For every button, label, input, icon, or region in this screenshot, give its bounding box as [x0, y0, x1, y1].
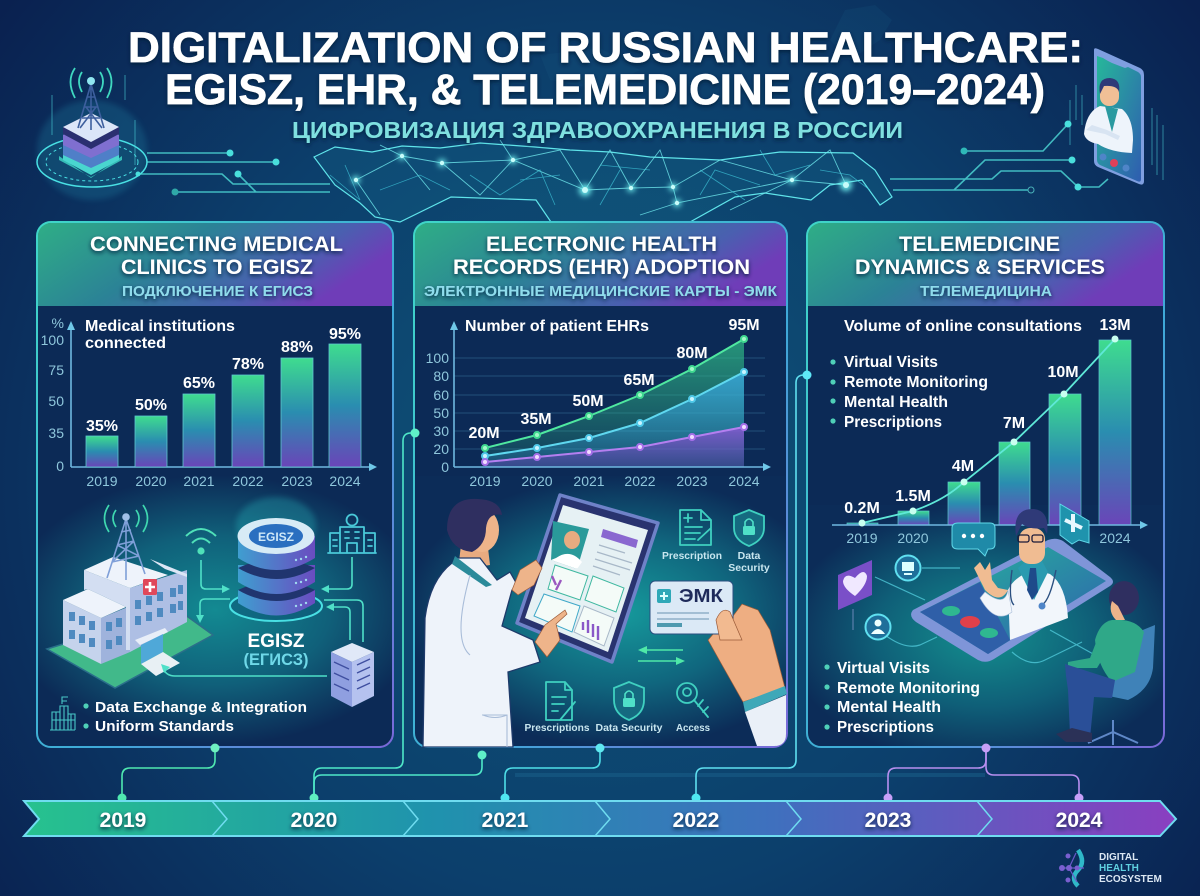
timeline connectors: [122, 375, 1079, 800]
bar chart: institutions connected: 88%: [281, 339, 313, 356]
panel heading: DYNAMICS & SERVICES: [855, 256, 1105, 279]
panel: EGISZ: [37, 222, 393, 747]
panel header: [415, 223, 786, 306]
bar chart: institutions connected: 50%: [135, 397, 167, 414]
EGISZ label: (ЕГИСЗ): [244, 650, 308, 669]
panel heading: ЭЛЕКТРОННЫЕ МЕДИЦИНСКИЕ КАРТЫ - ЭМК: [424, 283, 778, 300]
panel heading: ТЕЛЕМЕДИЦИНА: [920, 283, 1052, 300]
icon: data security: [614, 682, 644, 720]
area chart: patient EHRs: 60: [433, 387, 449, 403]
illustration: patient on chair: [1056, 581, 1155, 745]
bar chart: institutions connected: Medical institutions: [85, 318, 235, 335]
area chart: patient EHRs: 2020: [521, 473, 553, 489]
services list top: Mental Health: [844, 394, 948, 411]
icon: city grid: [50, 697, 75, 730]
area chart: patient EHRs: 50: [433, 405, 449, 421]
panel heading: ELECTRONIC HEALTH: [486, 233, 717, 256]
bar chart: institutions connected: 75: [48, 362, 64, 378]
bar chart: institutions connected: 2022: [232, 473, 264, 489]
area chart: patient EHRs: [426, 317, 771, 489]
area chart: patient EHRs: 2021: [573, 473, 605, 489]
EGISZ label: EGISZ: [248, 631, 305, 652]
area chart: patient EHRs: 20: [433, 441, 449, 457]
timeline arrow 2019–2024: 2020: [291, 809, 337, 832]
services list bottom: Mental Health: [837, 699, 941, 716]
area chart: patient EHRs: 2023: [676, 473, 708, 489]
area chart: patient EHRs: 0: [441, 459, 449, 475]
panel: EHR: [414, 222, 787, 747]
panel heading: ПОДКЛЮЧЕНИЕ К ЕГИСЗ: [122, 283, 313, 300]
EMK card in hand: ЭМК: [679, 586, 724, 606]
bar chart: institutions connected: 78%: [232, 356, 264, 373]
circuit lines left: [136, 150, 330, 196]
chart: online consultations: 7M: [1003, 415, 1025, 432]
logo: digital health ecosystem: HEALTH: [1099, 863, 1139, 874]
bar chart: institutions connected: 100: [41, 332, 64, 348]
icon: medical cross bubble: [1060, 504, 1089, 544]
bar chart: institutions connected: %: [52, 315, 64, 331]
area chart: patient EHRs: 95M: [728, 317, 760, 334]
icon: prescription: [680, 510, 711, 545]
map of Russia network: [314, 5, 892, 222]
icon labels: [662, 550, 770, 574]
services list top: Remote Monitoring: [844, 374, 988, 391]
bar chart: institutions connected: 95%: [329, 326, 361, 343]
icon labels: Data: [738, 550, 761, 562]
panel heading: CLINICS TO EGISZ: [121, 256, 313, 279]
icon: monitor: [896, 556, 920, 580]
icon: shield: [734, 510, 764, 546]
panel heading: [855, 233, 1105, 300]
services list top: Prescriptions: [844, 414, 942, 431]
bar chart: institutions connected: 2020: [135, 473, 167, 489]
area chart: patient EHRs: Number of patient EHRs: [465, 318, 649, 335]
bar chart: institutions connected: [41, 315, 377, 489]
bottom icon labels: [524, 722, 710, 734]
chart: online consultations: 13M: [1099, 317, 1131, 334]
icon labels: Security: [728, 562, 770, 574]
chart: online consultations: 2019: [846, 530, 878, 546]
timeline arrow 2019–2024: [24, 801, 1176, 836]
icon: access key: [677, 683, 708, 717]
icon: clinic: [328, 514, 376, 553]
area chart: patient EHRs: 2019: [469, 473, 501, 489]
bottom icon labels: Prescriptions: [524, 722, 590, 734]
panel heading: RECORDS (EHR) ADOPTION: [453, 256, 750, 279]
timeline arrow 2019–2024: 2023: [865, 809, 911, 832]
title: EGISZ, EHR, & TELEMEDICINE (2019–2024): [165, 66, 1045, 114]
services list top: Virtual Visits: [844, 354, 938, 371]
bar chart: institutions connected: connected: [85, 335, 166, 352]
area chart: patient EHRs: 80: [433, 368, 449, 384]
title: DIGITALIZATION OF RUSSIAN HEALTHCARE:: [128, 24, 1083, 72]
area chart: patient EHRs: 80M: [676, 345, 708, 362]
area chart: patient EHRs: 100: [426, 350, 449, 366]
services list bottom: Remote Monitoring: [837, 680, 980, 697]
timeline arrow 2019–2024: 2019: [100, 809, 146, 832]
data flow arrows: [161, 557, 363, 676]
bar chart: institutions connected: 35: [48, 425, 64, 441]
area chart: patient EHRs: 35M: [520, 411, 552, 428]
bar chart: institutions connected: 2021: [183, 473, 215, 489]
bottom icon labels: Access: [676, 722, 710, 734]
panel: telemedicine: [807, 222, 1164, 747]
illustration: hospital building: [47, 505, 213, 688]
panel heading: CONNECTING MEDICAL: [90, 233, 343, 256]
chart: online consultations: 10M: [1047, 364, 1079, 381]
bar chart: institutions connected: 50: [48, 393, 64, 409]
services list bottom: Virtual Visits: [837, 660, 930, 677]
area chart: patient EHRs: 30: [433, 423, 449, 439]
title: [128, 24, 1083, 143]
connector lines: [875, 568, 1095, 663]
panel heading: TELEMEDICINE: [899, 233, 1060, 256]
chart: online consultations: 4M: [952, 458, 974, 475]
bullet list: Uniform Standards: [95, 718, 234, 735]
chart: online consultations: 2020: [897, 530, 929, 546]
illustration: phone with doctor: [911, 509, 1113, 662]
icon labels: Prescription: [662, 550, 722, 562]
chart: online consultations: [832, 317, 1148, 546]
icon: heart tag: [838, 560, 872, 630]
EGISZ label: [244, 631, 308, 669]
area chart: patient EHRs: 20M: [468, 425, 500, 442]
panel heading: [90, 233, 343, 300]
bottom icon labels: Data Security: [596, 722, 663, 734]
logo: digital health ecosystem: DIGITAL: [1099, 852, 1138, 863]
bullet list: [83, 699, 307, 735]
timeline arrow 2019–2024: 2024: [1056, 809, 1103, 832]
icon: person: [866, 614, 890, 640]
area chart: patient EHRs: 2022: [624, 473, 656, 489]
panel header: [38, 223, 392, 306]
area chart: patient EHRs: 2024: [728, 473, 760, 489]
icon: tower on data stack: [37, 68, 147, 200]
panel header: [808, 223, 1163, 306]
timeline arrow 2019–2024: 2021: [482, 809, 529, 832]
bar chart: institutions connected: 35%: [86, 418, 118, 435]
icon: EGISZ database: [230, 497, 322, 621]
services list bottom: [824, 660, 980, 736]
timeline arrow 2019–2024: 2022: [673, 809, 719, 832]
logo: digital health ecosystem: ECOSYSTEM: [1099, 874, 1162, 885]
bar chart: institutions connected: 0: [56, 458, 64, 474]
chart: online consultations: Volume of online consultations: [844, 318, 1082, 335]
bar chart: institutions connected: 2019: [86, 473, 118, 489]
icon: EGISZ database: EGISZ: [258, 530, 294, 544]
illustration: doctor with tablet: [423, 495, 658, 747]
EMK card in hand: [650, 581, 787, 746]
circuit lines right: [890, 85, 1163, 193]
area chart: patient EHRs: 65M: [623, 372, 655, 389]
services list top: [830, 354, 988, 431]
panel heading: [424, 233, 778, 300]
area chart: patient EHRs: 50M: [572, 393, 604, 410]
bar chart: institutions connected: 2024: [329, 473, 361, 489]
title: ЦИФРОВИЗАЦИЯ ЗДРАВООХРАНЕНИЯ В РОССИИ: [292, 117, 903, 143]
bar chart: institutions connected: 65%: [183, 375, 215, 392]
chart: online consultations: 2024: [1099, 530, 1131, 546]
icon: prescriptions: [546, 682, 575, 720]
icon: server: [331, 643, 374, 707]
icon: doctor in phone: [1084, 48, 1144, 185]
chart: online consultations: 1.5M: [895, 488, 931, 505]
exchange arrows: [638, 646, 685, 665]
timeline nodes: [118, 370, 1084, 802]
icon: wifi: [186, 529, 216, 555]
icon: chat bubble: [952, 523, 995, 556]
services list bottom: Prescriptions: [837, 719, 934, 736]
bar chart: institutions connected: 2023: [281, 473, 313, 489]
bullet list: Data Exchange & Integration: [95, 699, 307, 716]
chart: online consultations: 0.2M: [844, 500, 880, 517]
logo: digital health ecosystem: [1059, 850, 1162, 886]
